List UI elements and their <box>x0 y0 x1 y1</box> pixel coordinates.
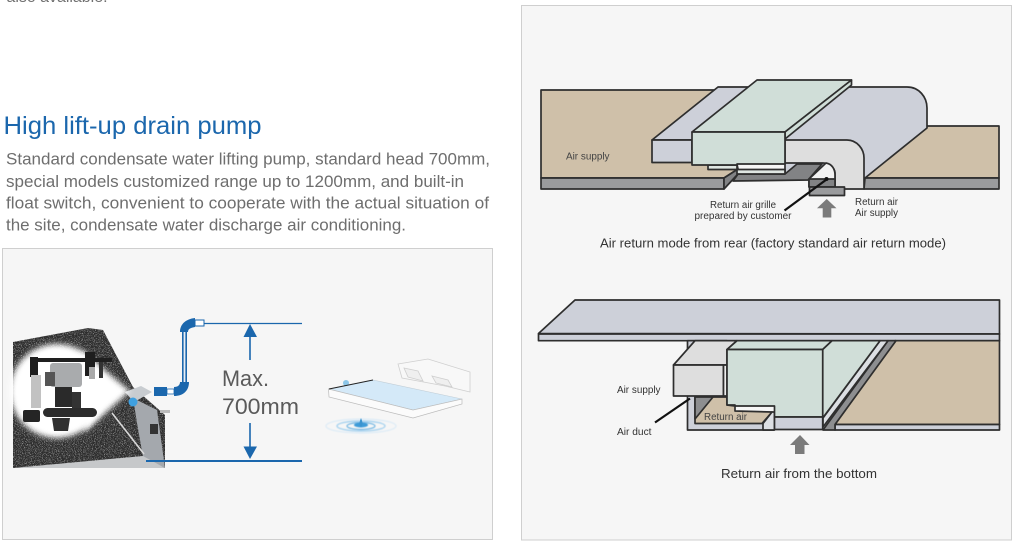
icon: indoor unit with water drip <box>326 359 470 433</box>
description text: Standard condensate water lifting pump, standard head 700mm, <box>6 150 490 168</box>
description text: special models customized range up to 1200mm, and built-in <box>6 172 464 191</box>
label: return air grille <box>694 200 792 222</box>
side enclosure <box>688 341 774 430</box>
diagonal trim <box>823 341 896 430</box>
heading: High lift-up drain pump <box>4 112 262 140</box>
caption: bottom return: Return air from the bottom <box>721 467 877 481</box>
panel: air return modes <box>522 6 1012 540</box>
ceiling right <box>835 341 1000 430</box>
supply duct <box>674 341 737 396</box>
supply duct <box>652 87 927 178</box>
arrow: return air bottom <box>790 435 810 454</box>
ceiling slab <box>538 300 1000 341</box>
indoor unit <box>692 80 852 165</box>
panel: drain pump lift <box>2 248 492 540</box>
dimension label <box>222 366 299 419</box>
dimension label: Max. <box>222 366 269 391</box>
label: air duct: Air duct <box>617 427 652 438</box>
underside recess <box>708 164 822 189</box>
pump photo <box>10 328 170 468</box>
dimension label: 700mm <box>222 394 299 419</box>
label: return air grille: Return air grille <box>710 200 776 211</box>
return air grille <box>809 163 844 196</box>
ceiling left <box>541 90 738 189</box>
label: return air: Return air <box>704 412 748 423</box>
return elbow <box>785 140 864 189</box>
arrow: return air rear <box>817 199 836 218</box>
ceiling right <box>864 126 999 189</box>
caption: rear return: Air return mode from rear (factory standard air return mode) <box>600 236 946 250</box>
label: air supply: Air supply <box>566 152 610 162</box>
leader line: air duct <box>655 398 690 422</box>
label: return air supply <box>855 197 899 219</box>
diagram: air return from rear <box>541 80 999 196</box>
label: return air grille: prepared by customer <box>694 211 792 222</box>
drain pipe <box>154 318 204 396</box>
label: return air supply: Return air <box>855 197 899 208</box>
indoor unit <box>727 341 880 430</box>
arrow: down <box>244 423 257 459</box>
label: return air supply: Air supply <box>855 208 898 219</box>
arrow: up <box>244 324 257 360</box>
dimension lines <box>146 324 302 461</box>
description text: the site, condensate water discharge air conditioning. <box>6 216 406 234</box>
leader line: grille <box>784 177 828 210</box>
description text <box>6 150 490 234</box>
label: air supply: Air supply <box>617 385 660 396</box>
description text: float switch, convenient to cooperate with the actual situation of <box>6 194 489 212</box>
diagram: return from bottom <box>538 300 1000 430</box>
